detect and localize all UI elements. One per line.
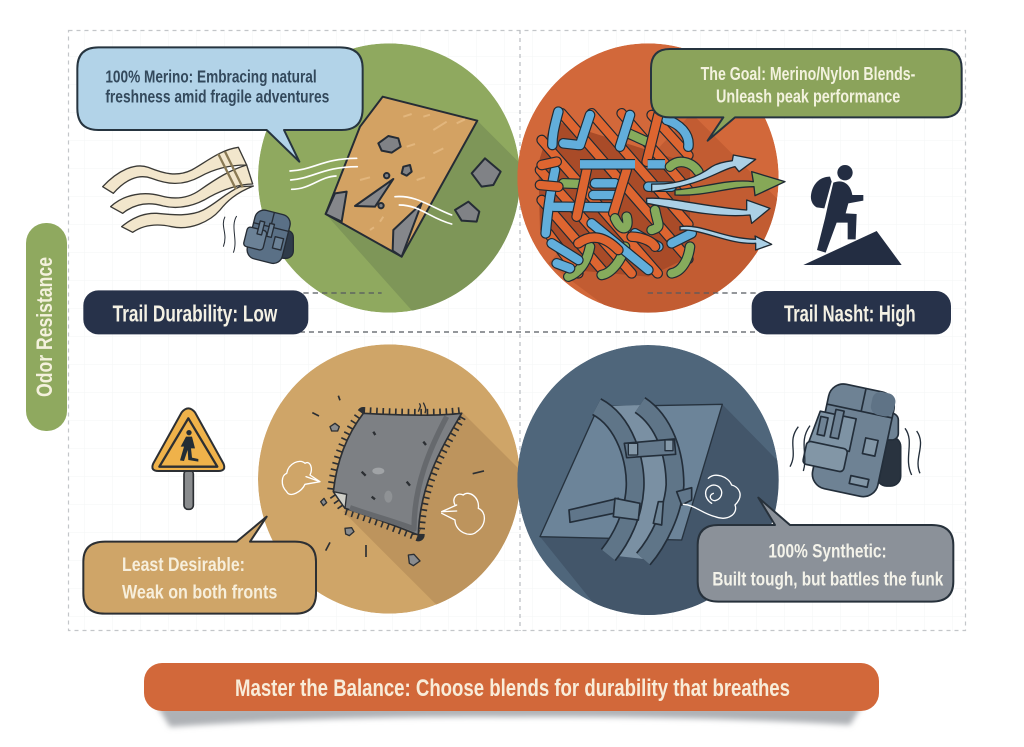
icon: large backpack: [790, 379, 921, 499]
arrows: breathable performance: [647, 155, 785, 250]
panel: 100% Merino quadrant: [76, 43, 519, 334]
callout: 100% Synthetic: 100% Synthetic:: [768, 542, 887, 563]
panel: 100% Synthetic quadrant: [517, 345, 953, 635]
icon: hiker climbing: [803, 165, 902, 265]
icon: odor puffs: [282, 461, 484, 534]
x-axis pill: Trail Nasht High: Trail Nasht: High: [784, 300, 916, 326]
icon: merino fabric strips: [103, 147, 253, 232]
slate circle: [517, 345, 779, 615]
green circle: [258, 43, 519, 313]
x-axis pill: Trail Durability Low: Trail Durability: Low: [113, 300, 278, 326]
callout: 100% Synthetic: Built tough, but battles the funk: [712, 570, 944, 591]
callout: 100% Merino: [77, 47, 363, 162]
wind lines: [290, 158, 452, 224]
panel: Least Desirable quadrant: [82, 344, 519, 615]
tan circle: [258, 344, 519, 614]
y-axis label: Odor Resistance: [26, 223, 67, 431]
callout: 100% Merino: 100% Merino: Embracing natural: [105, 67, 317, 87]
banner: Master the Balance: Master the Balance: Choose blends for durability that breathes: [235, 675, 790, 702]
x-axis pill: Trail Durability Low: [83, 290, 308, 334]
callout: The Goal: Unleash peak performance: [716, 86, 900, 107]
orange circle: [517, 43, 788, 330]
icon: woven merino and nylon fabric: [538, 112, 698, 277]
x-axis pill: Trail Nasht High: [752, 291, 951, 334]
callout: The Goal: The Goal: Merino/Nylon Blends-: [701, 63, 915, 84]
callout: 100% Synthetic: [698, 498, 953, 602]
callout: The Goal: [651, 49, 962, 141]
callout: Least Desirable: Least Desirable:: [122, 555, 245, 576]
icon: odor swirl: [683, 475, 740, 518]
panel: Merino/Nylon blend quadrant: [517, 43, 962, 334]
icon: caution sign: [152, 408, 224, 509]
banner: Master the Balance: [144, 663, 879, 727]
icon: small backpack: [223, 207, 293, 265]
icon: worn grey fabric: [312, 396, 484, 566]
callout: 100% Merino: freshness amid fragile adventures: [105, 87, 329, 107]
callout: Least Desirable: [83, 517, 316, 614]
y-axis label: Odor Resistance: Odor Resistance: [32, 257, 57, 397]
callout: Least Desirable: Weak on both fronts: [122, 582, 277, 603]
icon: synthetic fabric straps: [540, 404, 722, 559]
icon: rocky trail patch: [326, 97, 501, 257]
